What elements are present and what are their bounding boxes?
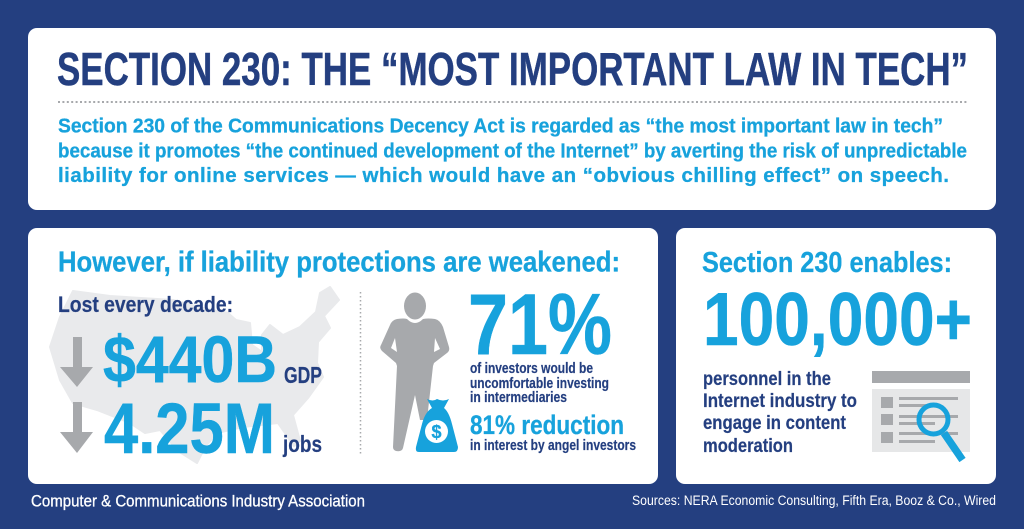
- intro text: [58, 114, 967, 187]
- footer: organization: Computer & Communications Industry Association: [31, 492, 365, 510]
- panel: Section 230 enables: [676, 228, 996, 484]
- angel investors text: in interest by angel investors: [470, 437, 636, 454]
- subheading: Lost every decade:: [58, 292, 233, 317]
- intro text: liability for online services — which would have an “obvious chilling effect” on speech.: [58, 164, 949, 187]
- stat: GDP: GDP: [284, 362, 322, 388]
- stat: 71%: 71%: [468, 277, 612, 373]
- intro text: Section 230 of the Communications Decency Act is regarded as “the most important law in tech”: [58, 114, 943, 138]
- panel heading: However, if liability protections are weakened:: [58, 246, 620, 278]
- investors text: [470, 360, 609, 406]
- personnel text: engage in content: [703, 413, 847, 434]
- footer: sources: Sources: NERA Economic Consulting, Fifth Era, Booz & Co., Wired: [632, 493, 996, 508]
- stat: jobs: jobs: [282, 431, 322, 457]
- icon: down arrow jobs: [60, 402, 93, 453]
- stat: jobs: 4.25M: [104, 390, 275, 469]
- icon: money bag: [416, 399, 458, 452]
- personnel text: [703, 369, 857, 457]
- panel: liability protections weakened: [28, 228, 658, 484]
- personnel text: personnel in the: [703, 369, 831, 390]
- investors text: of investors would be: [470, 360, 593, 377]
- icon: down arrow GDP: [60, 337, 93, 387]
- icon: document with magnifier: [872, 371, 970, 460]
- icon: investor figure: [380, 292, 449, 451]
- map: United States silhouette: [50, 287, 339, 463]
- panel heading: Section 230 enables:: [702, 247, 952, 279]
- personnel text: moderation: [703, 436, 793, 457]
- stat: 100,000+: 100,000+: [703, 277, 972, 361]
- intro text: because it promotes “the continued development of the Internet” by averting the risk of unpredictable: [58, 140, 967, 162]
- personnel text: Internet industry to: [703, 391, 857, 412]
- investors text: uncomfortable investing: [470, 375, 609, 392]
- stat: GDP: $440B: [103, 322, 277, 396]
- stat: 81% reduction: 81% reduction: [470, 410, 624, 440]
- investors text: in intermediaries: [470, 389, 567, 406]
- icon: money bag: $: [431, 422, 442, 442]
- panel: intro: [28, 28, 996, 210]
